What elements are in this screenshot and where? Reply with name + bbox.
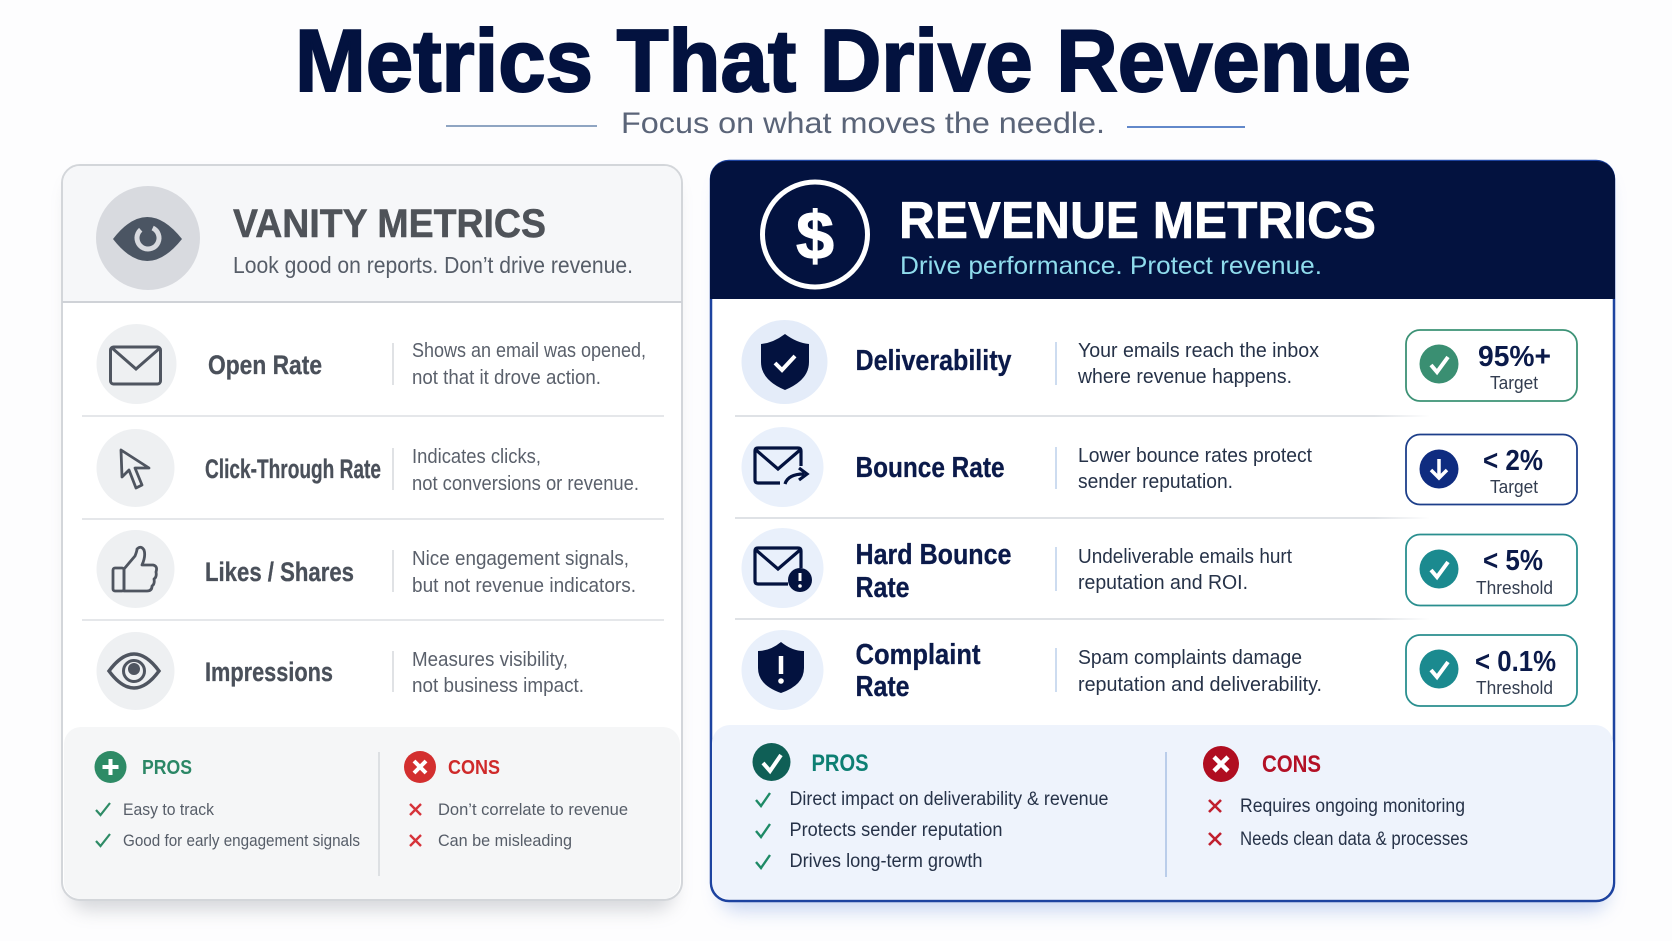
metric name: hard bounce rate: Rate [856,572,910,604]
vanity header: VANITY METRICS [233,202,546,246]
badge: under 0.1% threshold: < 0.1% [1475,646,1556,678]
revenue pros: Drives long-term growth [790,851,982,872]
row: deliverability [742,320,1577,404]
row: bounce rate: sender reputation. [1078,470,1233,493]
row: impressions: not business impact. [412,675,584,697]
row: hard bounce rate [742,528,1577,608]
row: impressions: Impressions [205,657,333,687]
row: hard bounce rate: Undeliverable emails hurt [1078,545,1292,568]
revenue pros: Protects sender reputation [790,820,1002,841]
icon: eye badge [96,186,200,290]
revenue pros [752,743,1108,872]
revenue pros and cons [712,725,1613,899]
row: deliverability: Your emails reach the inbox [1078,339,1320,362]
row: bounce rate: Bounce Rate [856,452,1004,484]
vanity cons [404,751,628,850]
badge: 95%+ target: Target [1490,372,1538,393]
row: likes / shares: Likes / Shares [205,557,354,587]
vanity cons: CONS [448,756,500,779]
row: click-through rate: not conversions or revenue. [412,473,639,495]
icon: shield alert [742,630,824,710]
badge: under 2% target: < 2% [1483,445,1543,477]
revenue header [710,161,1615,299]
vanity header [62,166,682,302]
vanity pros: Easy to track [123,800,214,819]
metric name: hard bounce rate: Hard Bounce [856,539,1012,571]
icon: cursor [96,429,174,507]
revenue header: Drive performance. Protect revenue. [900,252,1322,280]
row: open rate: Open Rate [208,350,322,380]
row: likes / shares: but not revenue indicators. [412,575,636,597]
revenue cons: CONS [1262,751,1321,778]
vanity pros: Good for early engagement signals [123,831,360,850]
vanity pros [94,751,360,850]
icon: envelope with arrow [742,427,824,507]
vanity cons: Can be misleading [438,831,572,850]
revenue pros: Direct impact on deliverability & revenue [790,789,1108,810]
metric name: complaint rate: Complaint [856,639,981,671]
badge: under 5% threshold: < 5% [1483,545,1543,577]
revenue pros: PROS [812,750,868,777]
icon: dollar: $ [796,198,834,274]
row: complaint rate: reputation and deliverability. [1078,673,1322,696]
revenue header: REVENUE METRICS [899,192,1376,250]
icon: thumbs up [96,530,174,608]
row: click-through rate: Click-Through Rate [205,454,381,484]
badge: under 2% target: Target [1490,476,1538,497]
row: click-through rate: Indicates clicks, [412,446,541,468]
row: bounce rate: Lower bounce rates protect [1078,444,1312,467]
icon: envelope [96,324,176,404]
row: bounce rate [742,427,1577,507]
row: hard bounce rate: reputation and ROI. [1078,571,1248,594]
vanity header: Look good on reports. Don’t drive revenue. [233,252,633,278]
row: likes / shares: Nice engagement signals, [412,548,629,570]
row: complaint rate: Spam complaints damage [1078,646,1302,669]
panel: vanity metrics [62,165,682,910]
row: likes / shares [96,530,636,608]
vanity cons: Don’t correlate to revenue [438,800,628,819]
row: open rate: Shows an email was opened, [412,340,646,362]
revenue cons [1203,746,1468,850]
row: open rate [96,324,646,404]
metric name: hard bounce rate [856,539,1012,604]
icon: eye outline [96,632,174,710]
vanity pros: PROS [142,756,192,779]
row: click-through rate [96,429,639,507]
badge: under 5% threshold: Threshold [1476,577,1553,598]
badge: under 5% threshold [1406,534,1577,606]
row: impressions [96,632,584,710]
badge: under 0.1% threshold [1406,635,1577,706]
title: Metrics That Drive Revenue [295,11,1411,110]
icon: shield check [742,320,828,404]
revenue cons: Requires ongoing monitoring [1240,796,1465,817]
row: open rate: not that it drove action. [412,367,601,389]
badge: 95%+ target: 95%+ [1478,341,1551,373]
metric name: complaint rate: Rate [856,671,910,703]
row: complaint rate [742,630,1577,710]
row: deliverability: Deliverability [856,345,1012,377]
revenue cons: Needs clean data & processes [1240,829,1468,850]
panel: revenue metrics [710,161,1615,911]
row: deliverability: where revenue happens. [1077,365,1292,388]
vanity pros and cons [64,727,680,899]
badge: under 0.1% threshold: Threshold [1476,677,1553,698]
subtitle: Focus on what moves the needle. [621,107,1105,140]
badge: 95%+ target [1406,330,1577,401]
icon: envelope with alert [742,528,824,608]
row: impressions: Measures visibility, [412,649,568,671]
metric name: complaint rate [856,639,981,703]
icon: dollar [762,182,868,287]
badge: under 2% target [1406,434,1577,504]
